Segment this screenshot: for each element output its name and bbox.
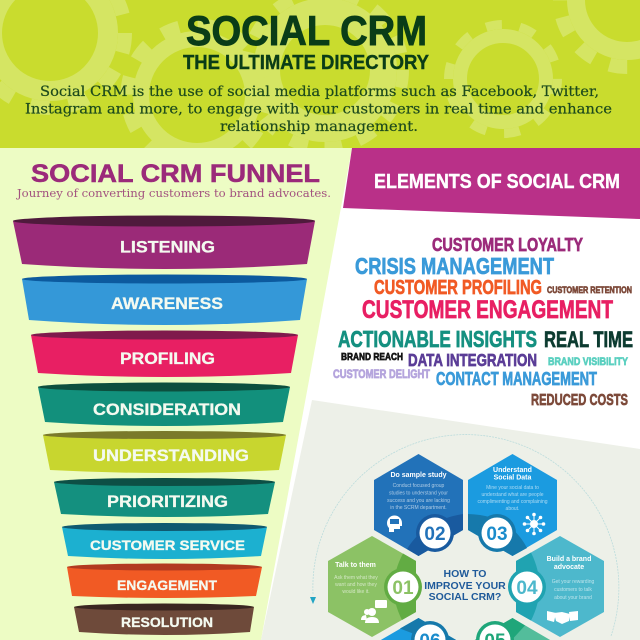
funnel level: listening: LISTENING (120, 238, 215, 256)
panel: funnel (0, 148, 352, 640)
step 02 hexagon: success and you are lacking (387, 498, 450, 504)
panel: elements banner (343, 148, 640, 219)
funnel level: understanding: UNDERSTANDING (93, 447, 249, 465)
word cloud: CUSTOMER PROFILING (374, 277, 542, 299)
icon: head (387, 516, 402, 532)
step 01 hexagon: would like it. (342, 589, 370, 595)
step 01 hexagon: want and how they (335, 582, 377, 588)
panel: elements background (312, 208, 640, 449)
funnel level: consideration (38, 382, 290, 426)
center question (424, 568, 506, 603)
funnel level: profiling: PROFILING (120, 350, 215, 368)
funnel level: prioritizing: PRIORITIZING (107, 493, 228, 511)
step 01 hexagon: 01 (392, 578, 414, 599)
step 03 hexagon: Social Data (494, 474, 531, 482)
funnel level: prioritizing (54, 478, 275, 517)
funnel level: profiling (31, 330, 298, 377)
step 02 hexagon: Conduct focused group (393, 483, 445, 489)
step 04 hexagon: customers to talk (554, 587, 592, 593)
intro text: relationship management. (220, 119, 418, 135)
step 04 hexagon: 04 (516, 578, 538, 599)
step 03 hexagon: 03 (486, 524, 508, 545)
step 04 hexagon: about your brand (554, 595, 592, 601)
funnel level: understanding (43, 431, 286, 473)
word cloud: CUSTOMER DELIGHT (333, 369, 430, 381)
subtitle: THE ULTIMATE DIRECTORY (183, 51, 429, 74)
step 04 hexagon: advocate (554, 564, 584, 571)
center question: SOCIAL CRM? (429, 591, 501, 603)
word cloud: CUSTOMER LOYALTY (432, 234, 584, 255)
icon: people talking (361, 600, 387, 623)
intro text: Social CRM is the use of social media platforms such as Facebook, Twitter, (40, 84, 599, 100)
step 03 hexagon: Mine your social data to (486, 485, 539, 491)
step 01 hexagon: Ask them what they (334, 575, 378, 581)
word cloud (333, 234, 633, 409)
step 04 hexagon (508, 536, 604, 637)
step 03 hexagon: Understand (493, 467, 532, 474)
title: SOCIAL CRM (186, 7, 427, 54)
funnel level: customer service (62, 523, 267, 559)
step 02 hexagon: 02 (424, 524, 446, 545)
center question: HOW TO (444, 568, 486, 580)
arrow: dashed circular path (310, 435, 619, 636)
step 05 hexagon (468, 618, 557, 640)
intro text: Instagram and more, to engage with your customers in real time and enhance (25, 102, 612, 118)
word cloud: ACTIONABLE INSIGHTS (338, 326, 537, 352)
funnel level: resolution: RESOLUTION (121, 614, 213, 630)
step 04 hexagon: Build a brand (547, 556, 591, 563)
funnel level: resolution (74, 604, 254, 635)
funnel level: awareness: AWARENESS (111, 295, 223, 313)
funnel level: engagement (67, 564, 262, 598)
funnel level: customer service: CUSTOMER SERVICE (90, 537, 245, 553)
step 03 hexagon: complimenting and complaining (477, 499, 548, 505)
icon: network (523, 513, 545, 535)
funnel level: listening (13, 216, 315, 269)
step 02 hexagon: Do sample study (390, 472, 447, 479)
step 02 hexagon (374, 454, 463, 556)
center question: IMPROVE YOUR (424, 580, 506, 592)
funnel level: awareness (22, 274, 307, 325)
step 04 hexagon: Get your rewarding (552, 579, 594, 585)
word cloud: CRISIS MANAGEMENT (355, 253, 554, 279)
word cloud: DATA INTEGRATION (408, 350, 537, 370)
funnel level: engagement: ENGAGEMENT (117, 577, 217, 593)
funnel subheading: Journey of converting customers to brand advocates. (16, 186, 331, 200)
step 03 hexagon (468, 454, 557, 556)
step 03 hexagon: understand what are people (482, 492, 544, 498)
icon: handshake (547, 611, 578, 624)
panel: how to improve background (261, 400, 640, 640)
step 06 hexagon (374, 618, 463, 640)
header panel (0, 0, 640, 165)
funnel level: consideration: CONSIDERATION (93, 401, 241, 419)
word cloud: BRAND REACH (341, 351, 403, 363)
funnel heading: SOCIAL CRM FUNNEL (31, 160, 320, 188)
step 01 hexagon: Talk to them (335, 562, 376, 569)
step 01 hexagon (328, 536, 422, 637)
step 02 hexagon: studies to understand your (389, 490, 448, 496)
step 03 hexagon: about. (506, 506, 519, 512)
step 02 hexagon: in the SCRM department. (390, 505, 447, 511)
intro text (25, 84, 612, 135)
